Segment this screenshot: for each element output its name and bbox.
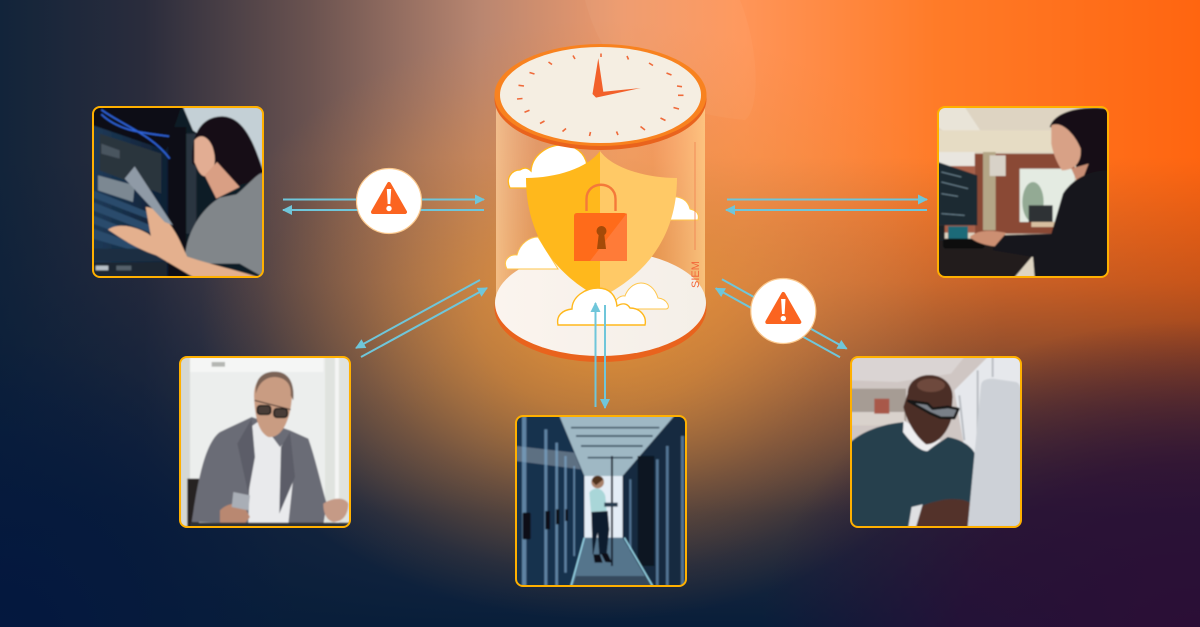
cloud: lower right bbox=[612, 283, 668, 309]
cloud: right bbox=[660, 197, 698, 220]
arrows between SIEM and endpoints bbox=[283, 200, 927, 408]
background swoosh highlight bbox=[585, 0, 756, 120]
alert badge right bbox=[751, 278, 816, 344]
arrows: lower left pair bbox=[356, 280, 487, 357]
cloud: front bbox=[558, 288, 645, 325]
photo: woman in data center aisle bbox=[516, 416, 686, 586]
photo frame bbox=[938, 107, 1108, 277]
arrows: top right pair bbox=[726, 200, 927, 210]
photo: man at computer bbox=[851, 357, 1021, 527]
photo frame bbox=[180, 357, 350, 527]
cylinder SIEM illustration bbox=[494, 44, 706, 362]
alert badge left bbox=[356, 168, 422, 234]
photo: woman checking server rack with tablet bbox=[93, 107, 263, 277]
padlock bbox=[574, 185, 627, 261]
clock ticks bbox=[517, 54, 684, 136]
shield bbox=[526, 151, 677, 298]
arrows: top left pair bbox=[283, 200, 484, 210]
clock hands bbox=[592, 58, 641, 98]
clock disc bbox=[494, 44, 706, 150]
photo frame bbox=[851, 357, 1021, 527]
SIEM label: SIEM bbox=[690, 261, 702, 288]
cloud: lower left bbox=[505, 237, 558, 269]
bottom disc bbox=[494, 250, 706, 362]
photo: woman coding at desk bbox=[938, 107, 1108, 277]
arrows: bottom pair bbox=[596, 303, 605, 408]
photo frame bbox=[516, 416, 686, 586]
photo frame bbox=[93, 107, 263, 277]
cylinder glass body bbox=[496, 95, 705, 305]
arrows: lower right pair bbox=[716, 279, 847, 357]
diagram bbox=[92, 44, 1109, 587]
cloud: upper left bbox=[508, 145, 587, 188]
photo: man with smartphone bbox=[180, 357, 350, 527]
